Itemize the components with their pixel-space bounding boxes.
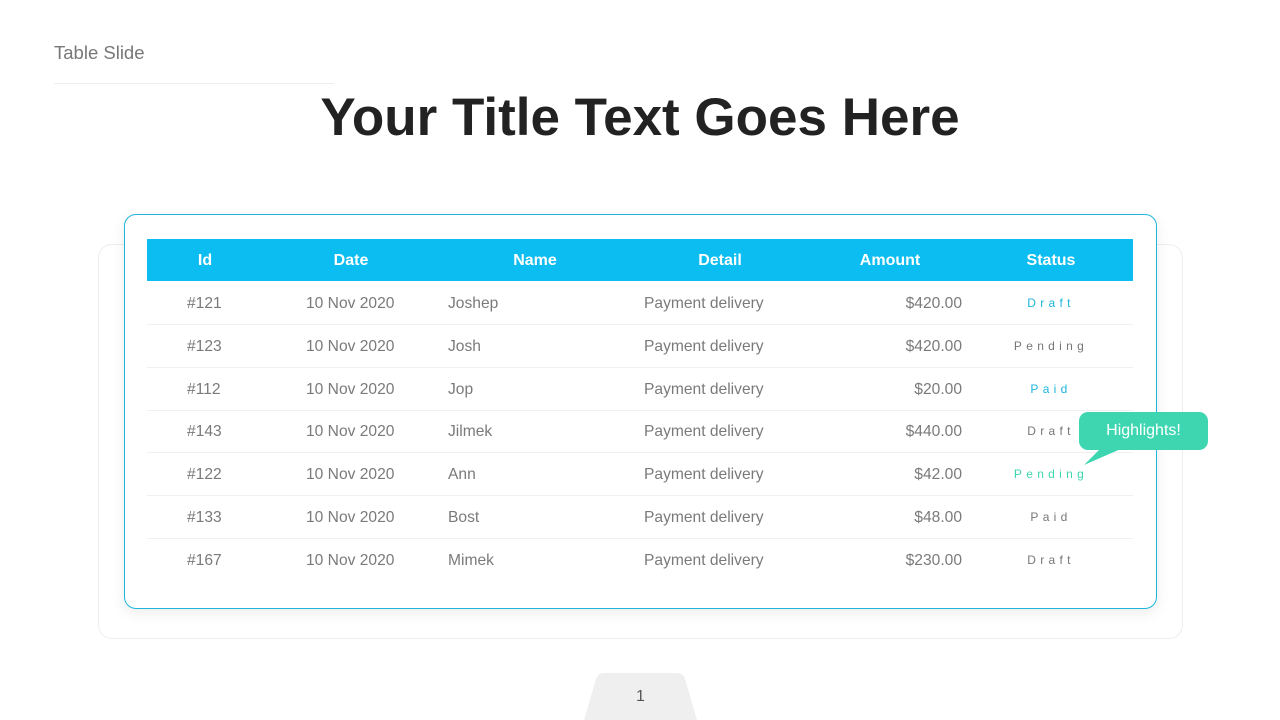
- table rows: 10 Nov 2020: [306, 295, 394, 312]
- table rows: #112: [187, 381, 221, 398]
- table header: Amount: [860, 252, 920, 269]
- table header: Name: [513, 252, 557, 269]
- table rows: $440.00: [906, 423, 962, 440]
- table rows: Draft: [1027, 553, 1075, 567]
- table rows: Paid: [1030, 510, 1072, 524]
- table rows: Draft: [1027, 424, 1075, 438]
- table rows: 10 Nov 2020: [306, 423, 394, 440]
- subtitle: Table Slide: Table Slide: [54, 42, 145, 63]
- table rows: Bost: [448, 509, 479, 526]
- table rows: $420.00: [906, 295, 962, 312]
- table rows: #167: [187, 552, 222, 569]
- callout: Highlights!: Highlights!: [1106, 422, 1181, 439]
- table rows: Joshep: [448, 295, 498, 312]
- table rows: Jop: [448, 381, 473, 398]
- table header: Status: [1027, 252, 1075, 269]
- table rows: #123: [187, 338, 222, 355]
- table rows: $42.00: [914, 466, 962, 483]
- table header: Id: [198, 252, 212, 269]
- page number tab: [584, 673, 697, 720]
- background card: [98, 244, 1183, 639]
- table header: [147, 239, 1133, 281]
- table rows: #143: [187, 423, 222, 440]
- table rows: 10 Nov 2020: [306, 466, 394, 483]
- panel: table card: [124, 214, 1157, 609]
- title: Your Title Text Goes Here: [320, 88, 960, 147]
- table rows: 10 Nov 2020: [306, 509, 394, 526]
- table rows: Payment delivery: [644, 295, 764, 312]
- table rows: $230.00: [906, 552, 962, 569]
- table rows: Josh: [448, 338, 481, 355]
- table header: Detail: [698, 252, 742, 269]
- table rows: Pending: [1014, 339, 1088, 353]
- table rows: Payment delivery: [644, 466, 764, 483]
- page number tab: 1: [636, 688, 645, 705]
- table rows: $48.00: [914, 509, 962, 526]
- table rows: Paid: [1030, 382, 1072, 396]
- table rows: Payment delivery: [644, 552, 764, 569]
- table header: Date: [334, 252, 368, 269]
- table rows: $420.00: [906, 338, 962, 355]
- table rows: Mimek: [448, 552, 494, 569]
- table rows: Ann: [448, 466, 476, 483]
- table rows: Draft: [1027, 296, 1075, 310]
- table rows: Payment delivery: [644, 509, 764, 526]
- table rows: $20.00: [914, 381, 962, 398]
- table rows: Payment delivery: [644, 338, 764, 355]
- table rows: #122: [187, 466, 222, 483]
- table rows: Pending: [1014, 467, 1088, 481]
- table rows: 10 Nov 2020: [306, 552, 394, 569]
- table rows: 10 Nov 2020: [306, 381, 394, 398]
- table rows: #121: [187, 295, 222, 312]
- table rows: Jilmek: [448, 423, 492, 440]
- table rows: Payment delivery: [644, 381, 764, 398]
- table rows: 10 Nov 2020: [306, 338, 394, 355]
- table rows: Payment delivery: [644, 423, 764, 440]
- callout: Highlights!: [1079, 412, 1208, 465]
- table rows: #133: [187, 509, 222, 526]
